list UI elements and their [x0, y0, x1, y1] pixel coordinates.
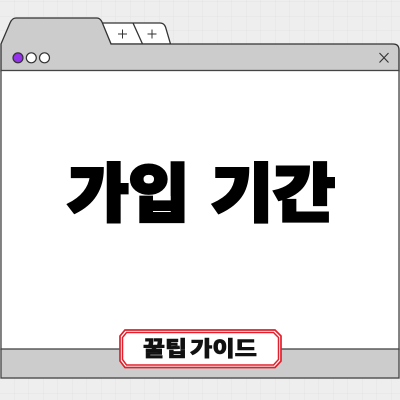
badge label: 가이드: [190, 333, 257, 363]
window title bar: [1, 18, 399, 71]
icon: white dot two: [40, 53, 50, 63]
icon: plus in first tab: [118, 30, 127, 38]
badge label: 꿀팁: [143, 333, 187, 363]
icon: white dot: [26, 53, 36, 63]
title: 기간: [211, 144, 335, 235]
icon: plus in second tab: [148, 30, 156, 38]
footer bar: [1, 349, 399, 378]
icon: close: [380, 53, 388, 62]
badge: [120, 330, 281, 368]
window content area: [1, 70, 399, 350]
window controls: [13, 53, 50, 63]
inactive tabs: [102, 23, 170, 44]
title: 가입: [68, 144, 190, 235]
icon: purple dot: [13, 53, 23, 63]
